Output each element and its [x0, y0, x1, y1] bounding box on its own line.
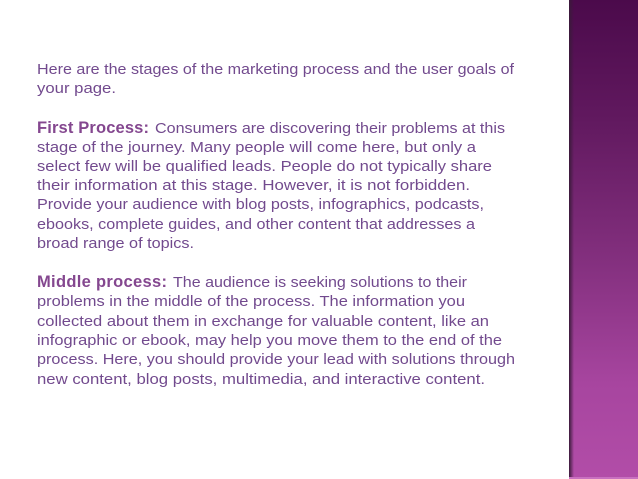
text block: first process: First Process: [37, 119, 149, 137]
text block: middle process: infographic or ebook, may help you move them to the end of the [37, 333, 502, 349]
sidebar: purple gradient band [569, 0, 638, 479]
text block: first process: Provide your audience with blog posts, infographics, podcasts, [37, 197, 484, 213]
text block: first process: ebooks, complete guides, and other content that addresses a [37, 217, 476, 233]
text block: first process [37, 119, 505, 252]
text block: first process: Consumers are discovering their problems at this [155, 121, 505, 137]
text block: first process: their information at this stage. However, it is not forbidden. [37, 178, 470, 194]
text block: first process: select few will be qualified leads. People do not typically share [37, 159, 492, 175]
text block: middle process: The audience is seeking solutions to their [173, 275, 467, 291]
text block: introduction: Here are the stages of the marketing process and the user goals of [37, 62, 515, 78]
text block: middle process: process. Here, you should provide your lead with solutions through [37, 352, 515, 368]
text block: middle process: problems in the middle of the process. The information you [37, 294, 465, 310]
text block: middle process: new content, blog posts, multimedia, and interactive content. [37, 372, 485, 388]
text block: middle process: Middle process: [37, 273, 167, 291]
text block: introduction: your page. [37, 81, 116, 97]
text block: first process: stage of the journey. Many people will come here, but only a [37, 140, 477, 156]
text block: introduction [37, 62, 515, 97]
text block: middle process: collected about them in exchange for valuable content, like an [37, 314, 489, 330]
text block: middle process [37, 273, 515, 388]
text block: first process: broad range of topics. [37, 236, 194, 252]
